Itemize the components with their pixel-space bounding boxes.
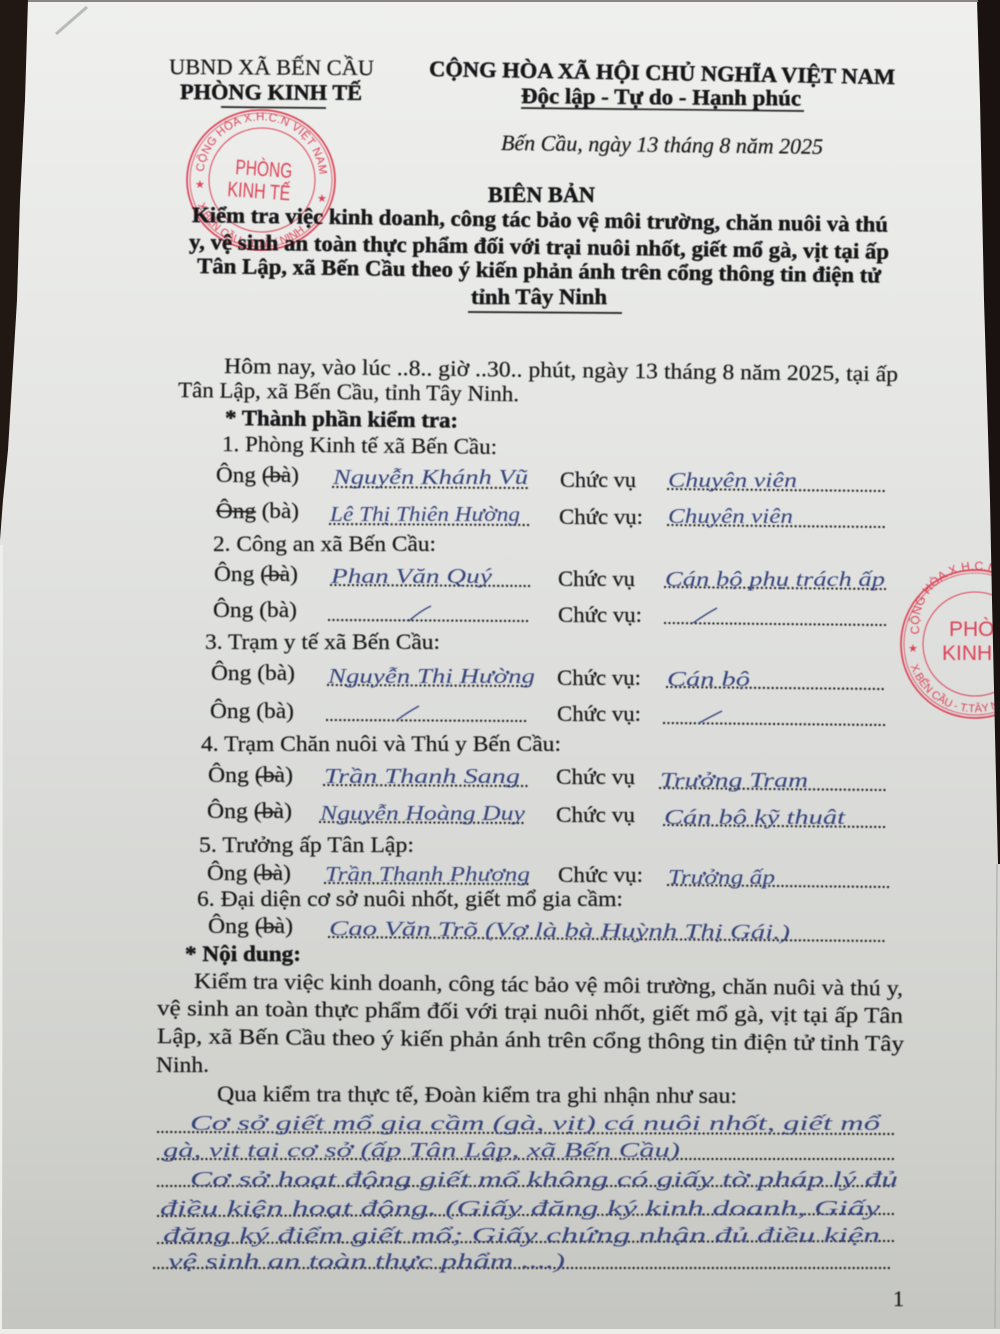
group 4: Trạm Chăn nuôi và Thú y: Ông (bà): [208, 762, 293, 787]
group 2: Công an: Phan Văn Quý: [330, 564, 493, 588]
group 4: Trạm Chăn nuôi và Thú y: 4. Trạm Chăn nuôi và Thú y Bến Cầu:: [201, 731, 561, 756]
stamp: Phòng Kinh tế (right edge): [899, 561, 1000, 720]
group 6: Đại diện cơ sở: Cao Văn Trõ (Vợ là bà Huỳnh Thị Gái.): [329, 916, 790, 944]
group 1: Phòng Kinh tế: Chuyên viên: [668, 468, 797, 492]
handwritten findings: điều kiện hoạt động. (Giấy đăng ký kinh doanh, Giấy: [160, 1196, 881, 1220]
group 4: Trạm Chăn nuôi và Thú y: Chức vụ: [556, 764, 635, 789]
handwritten findings: vệ sinh an toàn thực phẩm ....): [168, 1249, 565, 1273]
intro paragraph: Hôm nay, vào lúc ..8.. giờ ..30.. phút, ngày 13 tháng 8 năm 2025, tại ấp: [224, 353, 898, 386]
header: national motto: CỘNG HÒA XÃ HỘI CHỦ NGHĨA VIỆT NAM: [429, 56, 896, 89]
group 1: Phòng Kinh tế: Ông (bà): [216, 462, 299, 487]
dark background: right edge: [977, 0, 1000, 864]
title: Tân Lập, xã Bến Cầu theo ý kiến phản ánh trên cổng thông tin điện tử: [197, 253, 882, 288]
group 2: Công an: [213, 531, 885, 627]
content paragraph: Ninh.: [156, 1052, 209, 1077]
dark background: left edge: [0, 0, 28, 540]
stamp: Phòng Kinh tế (top left): PHÒNG: [235, 156, 293, 183]
document text: [154, 54, 904, 1311]
group 4: Trạm Chăn nuôi và Thú y: Nguyễn Hoàng Duy: [319, 801, 526, 825]
section heading: content: * Nội dung:: [185, 941, 301, 966]
group 4: Trạm Chăn nuôi và Thú y: Trưởng Trạm: [660, 768, 808, 792]
group 4: Trạm Chăn nuôi và Thú y: [201, 731, 886, 829]
title: [189, 182, 889, 313]
title: y, vệ sinh an toàn thực phẩm đối với trại nuôi nhốt, giết mổ gà, vịt tại ấp: [189, 229, 889, 264]
content paragraph: Kiểm tra việc kinh doanh, công tác bảo vệ môi trường, chăn nuôi và thú y,: [194, 968, 903, 1000]
group 1: Phòng Kinh tế: Lê Thị Thiên Hường: [329, 502, 520, 526]
header: issuing office: [169, 54, 374, 108]
group 6: Đại diện cơ sở: 6. Đại diện cơ sở nuôi nhốt, giết mổ gia cầm:: [197, 886, 623, 911]
group 2: Công an: Chức vụ:: [558, 602, 642, 627]
group 5: Trưởng ấp: Ông (bà): [207, 860, 291, 885]
group 3: Trạm y tế: Chức vụ:: [557, 665, 641, 690]
stamp: Phòng Kinh tế (top left): ★: [195, 179, 205, 191]
title: Kiểm tra việc kinh doanh, công tác bảo vệ môi trường, chăn nuôi và thú: [192, 202, 888, 237]
group 2: Công an: 2. Công an xã Bến Cầu:: [213, 531, 436, 556]
stamp: Phòng Kinh tế (top left): ★: [317, 193, 327, 205]
group 3: Trạm y tế: Cán bộ: [667, 667, 750, 691]
group 5: Trưởng ấp: Trưởng ấp: [668, 865, 775, 889]
group 5: Trưởng ấp: [199, 832, 892, 889]
handwritten findings: Cơ sở hoạt động giết mổ không có giấy tờ pháp lý đủ: [190, 1167, 898, 1191]
group 4: Trạm Chăn nuôi và Thú y: Trần Thanh Sang: [324, 764, 520, 788]
content paragraph: [156, 968, 904, 1077]
group 1: Phòng Kinh tế: [216, 431, 884, 529]
group 3: Trạm y tế: Ông (bà): [210, 698, 294, 723]
stamp: Phòng Kinh tế (top left): [185, 108, 337, 252]
header: national motto: [429, 56, 896, 111]
group 1: Phòng Kinh tế: Chức vụ:: [559, 504, 643, 529]
stamp: Phòng Kinh tế (right edge): ★: [908, 643, 918, 655]
group 3: Trạm y tế: 3. Trạm y tế xã Bến Cầu:: [205, 629, 440, 654]
handwritten findings: gà, vịt tại cơ sở (ấp Tân Lập, xã Bến Cầu): [163, 1138, 680, 1162]
bottom page edge: [0, 1329, 1000, 1334]
group 5: Trưởng ấp: 5. Trưởng ấp Tân Lập:: [199, 832, 414, 857]
stamp: Phòng Kinh tế (top left): KINH TẾ: [227, 178, 291, 205]
group 6: Đại diện cơ sở: Ông (bà): [208, 913, 293, 938]
group 1: Phòng Kinh tế: Chuyên viên: [668, 504, 793, 528]
title: BIÊN BẢN: [488, 182, 595, 207]
handwritten findings: đăng ký điểm giết mổ; Giấy chứng nhận đủ điều kiện: [163, 1223, 880, 1247]
group 2: Công an: Ông (bà): [213, 597, 297, 622]
group 2: Công an: Cán bộ phụ trách ấp: [665, 567, 885, 591]
date line: Bến Cầu, ngày 13 tháng 8 năm 2025: [501, 130, 823, 159]
group 5: Trưởng ấp: Chức vụ:: [558, 862, 643, 887]
group 2: Công an: Ông (bà): [214, 561, 298, 586]
group 3: Trạm y tế: Chức vụ:: [557, 701, 641, 726]
page edge sliver: right: [995, 864, 997, 1328]
group 4: Trạm Chăn nuôi và Thú y: Ông (bà): [207, 798, 292, 823]
header: issuing office: UBND XÃ BẾN CẦU: [169, 54, 374, 80]
group 3: Trạm y tế: Nguyễn Thị Hường: [327, 664, 535, 688]
group 3: Trạm y tế: [205, 629, 885, 726]
findings intro: Qua kiểm tra thực tế, Đoàn kiểm tra ghi nhận như sau:: [217, 1081, 737, 1108]
group 1: Phòng Kinh tế: Nguyễn Khánh Vũ: [332, 465, 529, 489]
intro paragraph: [178, 353, 898, 406]
staple mark: [56, 7, 87, 34]
handwritten findings: Cơ sở giết mổ gia cầm (gà, vịt) cá nuôi nhốt, giết mổ: [190, 1111, 882, 1135]
group 1: Phòng Kinh tế: Chức vụ: [560, 467, 636, 492]
group 4: Trạm Chăn nuôi và Thú y: Chức vụ: [556, 802, 635, 827]
content paragraph: vệ sinh an toàn thực phẩm đối với trại nuôi nhốt, giết mổ gà, vịt tại ấp Tân: [157, 995, 903, 1028]
section heading: inspection members: * Thành phần kiểm tra:: [225, 405, 458, 432]
group 1: Phòng Kinh tế: 1. Phòng Kinh tế xã Bến Cầu:: [222, 431, 497, 459]
page edge sliver: left: [0, 545, 3, 1329]
header: national motto: Độc lập - Tự do - Hạnh phúc: [521, 83, 801, 110]
stamp: Phòng Kinh tế (top left): CỘNG HÒA X.H.C.N VIỆT NAM: [196, 112, 328, 174]
group 3: Trạm y tế: Ông (bà): [211, 660, 295, 685]
title: tỉnh Tây Ninh: [471, 284, 607, 309]
page number: 1: [893, 1286, 904, 1311]
intro paragraph: Tân Lập, xã Bến Cầu, tỉnh Tây Ninh.: [178, 377, 519, 406]
group 5: Trưởng ấp: Trần Thanh Phương: [325, 862, 530, 886]
group 6: Đại diện cơ sở: [197, 886, 887, 944]
group 2: Công an: Chức vụ: [558, 566, 635, 591]
header: issuing office: PHÒNG KINH TẾ: [180, 79, 362, 105]
group 1: Phòng Kinh tế: Ông (bà): [216, 498, 299, 523]
stamp: Phòng Kinh tế (top left): X.BẾN CẦU - T.TÂY NINH: [197, 202, 304, 248]
content paragraph: Lập, xã Bến Cầu theo ý kiến phản ánh trên cổng thông tin điện tử tỉnh Tây: [157, 1023, 904, 1056]
handwritten findings: [154, 1111, 898, 1273]
dark background: top edge: [28, 0, 978, 2]
group 4: Trạm Chăn nuôi và Thú y: Cán bộ kỹ thuật: [664, 805, 847, 829]
